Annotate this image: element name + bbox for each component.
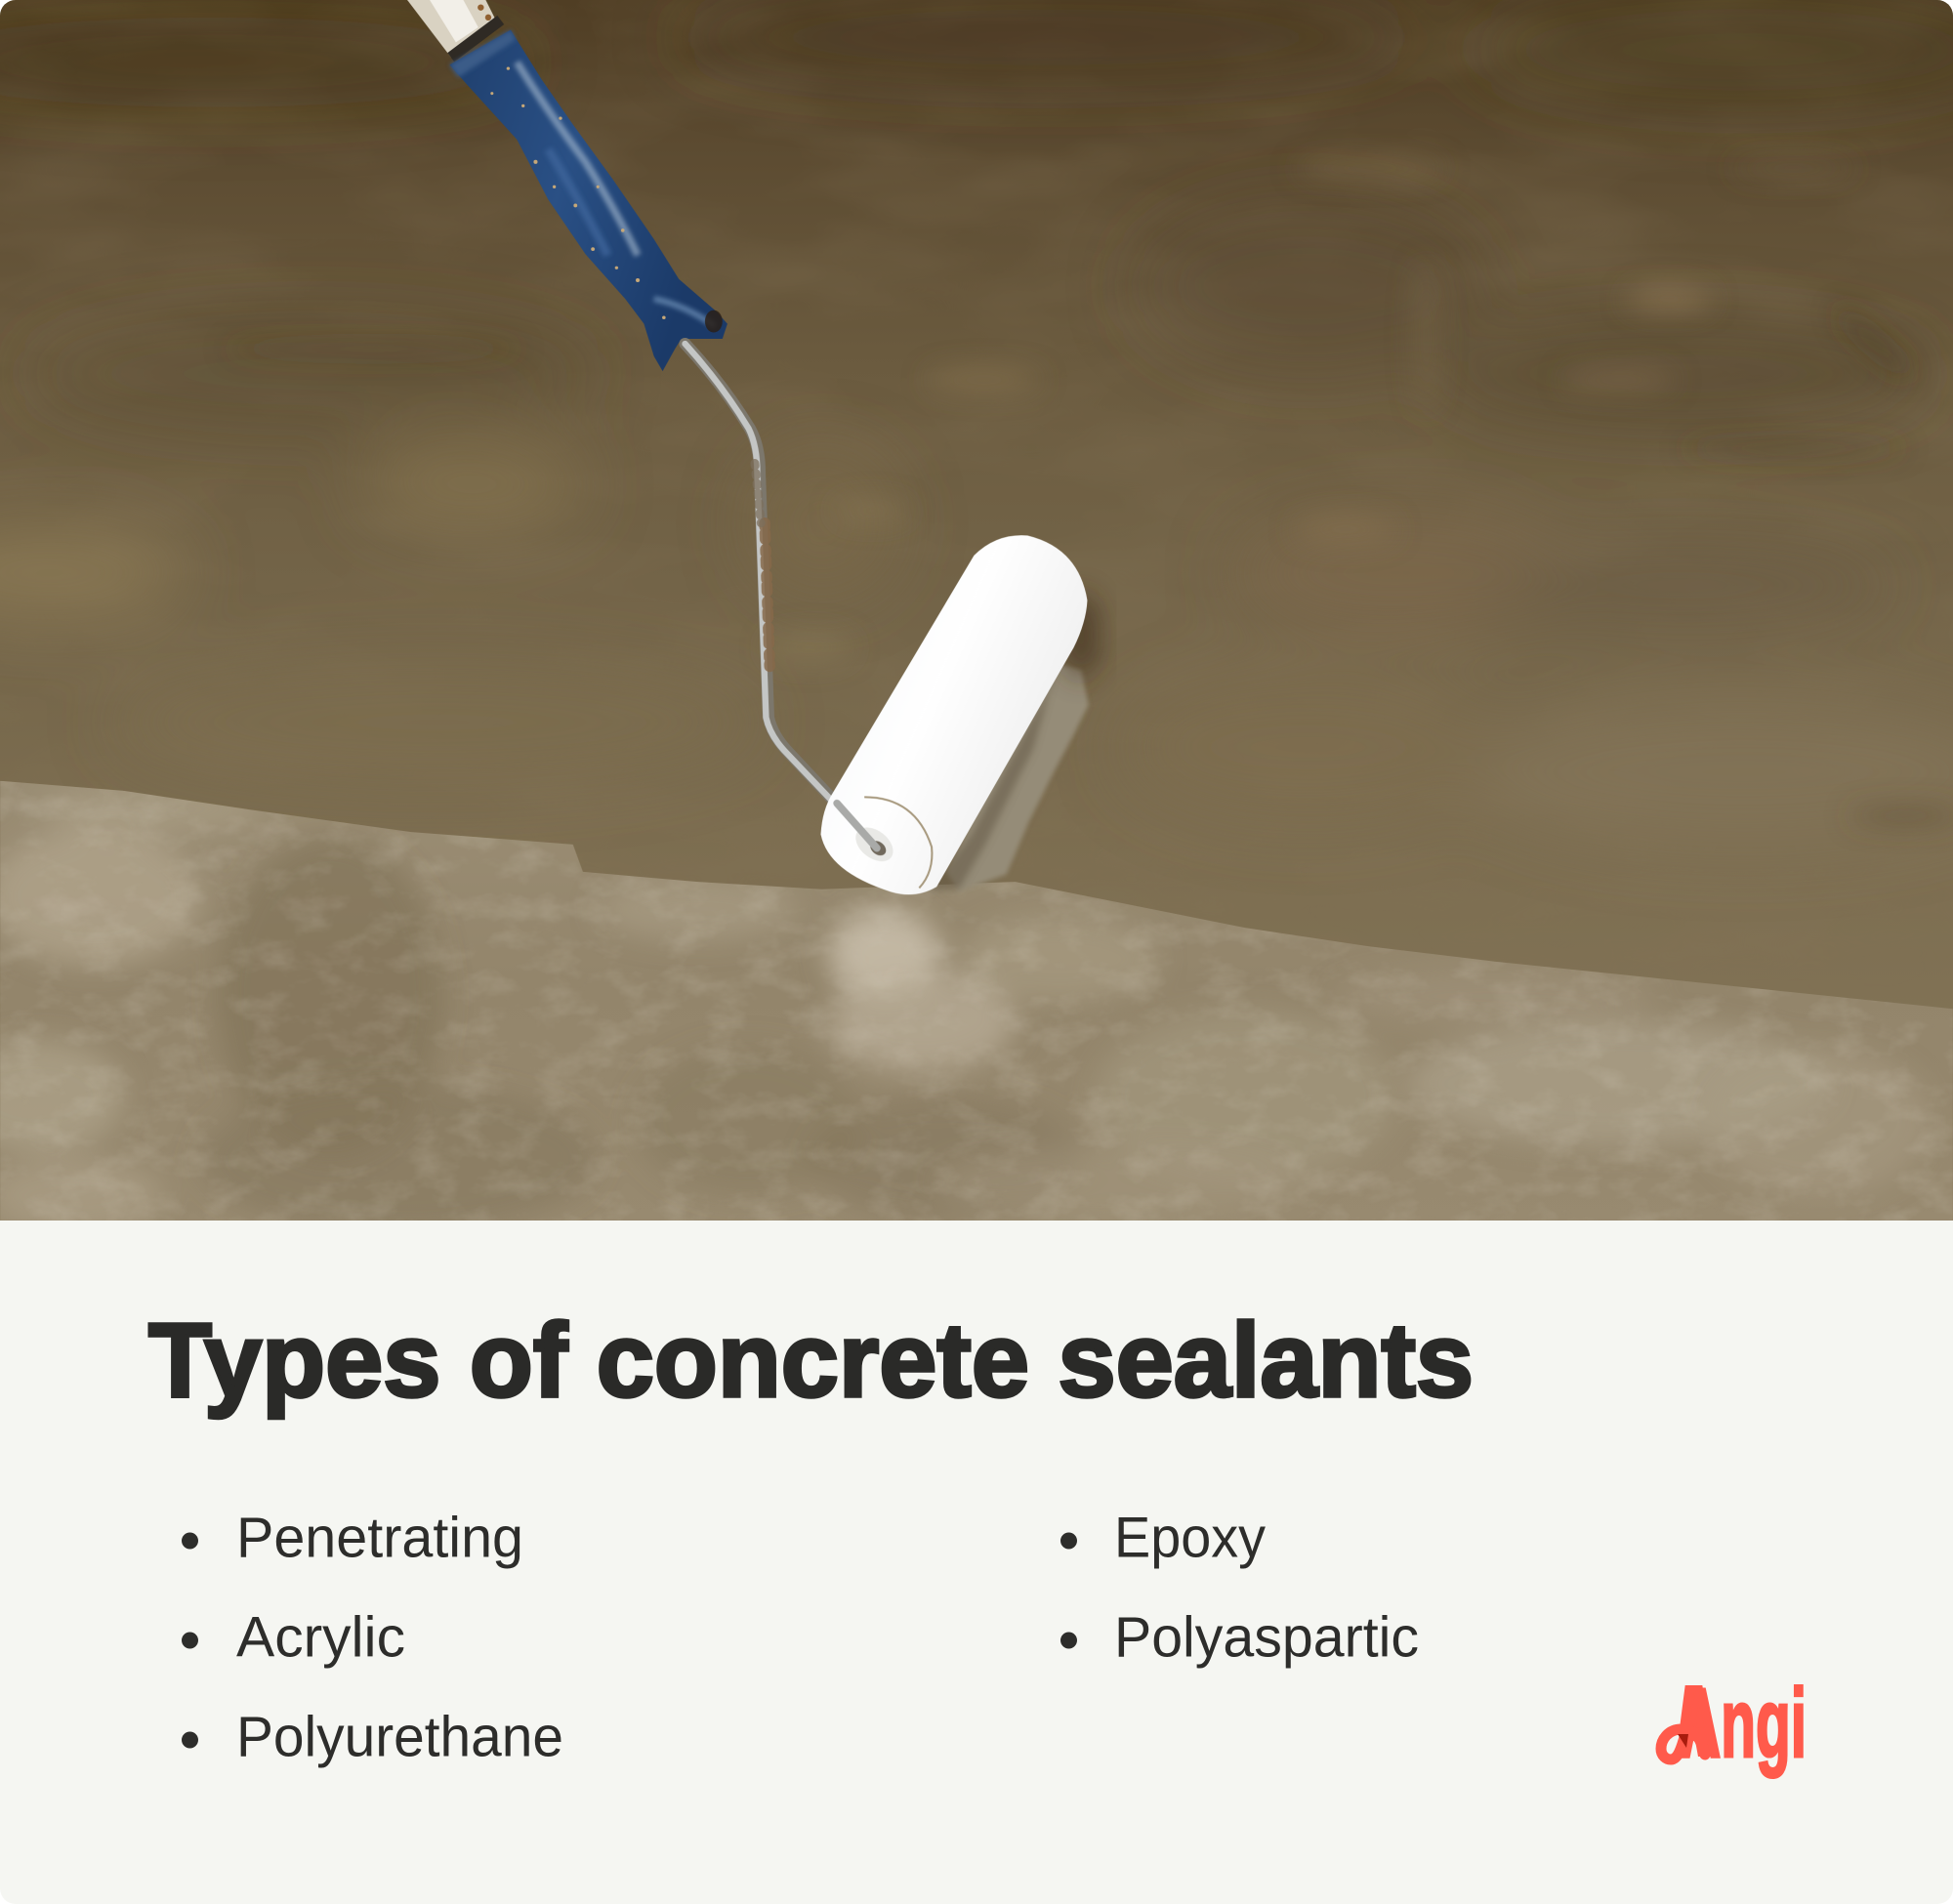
logo: Angi — [1661, 1669, 1807, 1778]
wire re-entering roller end — [837, 804, 877, 849]
white paint roller — [821, 535, 1088, 894]
wet sealant puddle and shadow by roller — [928, 593, 1099, 891]
metal roller frame wire — [686, 344, 880, 849]
list: right column — [1060, 1506, 1419, 1670]
list: left column — [182, 1506, 563, 1769]
item: Polyurethane: Polyurethane — [236, 1705, 563, 1769]
item: Polyaspartic: Polyaspartic — [1114, 1605, 1419, 1670]
wet concrete floor — [0, 0, 1953, 1221]
item: Penetrating: Penetrating — [236, 1506, 523, 1570]
item: Epoxy: Epoxy — [1114, 1506, 1266, 1570]
lower content panel — [147, 1301, 1807, 1779]
logo: Angi: Angi — [1680, 1669, 1807, 1778]
dry concrete area — [0, 747, 1953, 1233]
blue grip handle — [449, 30, 727, 371]
item: Acrylic: Acrylic — [236, 1605, 405, 1670]
wooden pole — [407, 0, 501, 58]
title: Types of concrete sealants — [148, 1301, 1474, 1419]
